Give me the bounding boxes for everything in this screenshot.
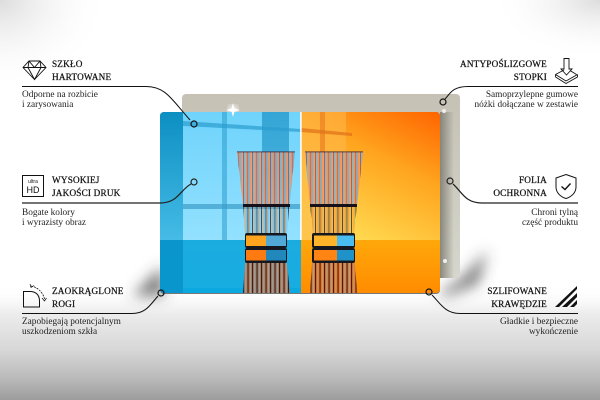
callout line: wysokiej jakości druk: [22, 179, 197, 203]
text: folia ochronna: część produktu: [522, 218, 578, 228]
heading: zaokrąglone rogi: ZAOKRĄGLONE: [52, 286, 124, 296]
heading: zaokrąglone rogi: ROGI: [52, 298, 75, 308]
text: zaokrąglone rogi: [22, 317, 121, 337]
text: szlifowane krawędzie: [500, 317, 578, 337]
callout line: folia ochronna: [447, 178, 578, 203]
heading: szlifowane krawędzie: [487, 286, 547, 310]
heading: antypoślizgowe stopki: ANTYPOŚLIZGOWE: [460, 58, 547, 68]
glass right: [305, 152, 363, 293]
text: folia ochronna: Chroni tylną: [531, 208, 578, 218]
heading: szkło hartowane: HARTOWANE: [52, 72, 111, 82]
icon: diamond: [23, 61, 46, 80]
sparkle: [226, 103, 240, 117]
cast shadows: [132, 250, 488, 297]
callout line: antypoślizgowe stopki: [440, 86, 578, 105]
glass left: [237, 152, 295, 293]
text: antypoślizgowe stopki: nóżki dołączane w zestawie: [474, 100, 578, 110]
callout line: szlifowane krawędzie: [426, 289, 578, 314]
heading: szkło hartowane: SZKŁO: [52, 58, 83, 68]
heading: szlifowane krawędzie: KRAWĘDZIE: [491, 298, 547, 308]
text: szkło hartowane: i zarysowania: [22, 100, 73, 110]
callout line: zaokrąglone rogi: [22, 290, 164, 314]
icon: rounded corner: [24, 284, 46, 307]
icon: ultra HD: ultra: [28, 179, 38, 185]
orange half: [300, 112, 440, 293]
back plate with standoffs: [182, 94, 460, 278]
heading: szlifowane krawędzie: SZLIFOWANE: [487, 286, 547, 296]
glass print: [160, 112, 440, 294]
heading: folia ochronna: FOLIA: [519, 174, 547, 184]
text: szkło hartowane: Odporne na rozbicie: [22, 90, 98, 100]
text: folia ochronna: [522, 208, 578, 228]
heading: folia ochronna: OCHRONNA: [493, 188, 547, 198]
text: szkło hartowane: [22, 90, 98, 110]
heading: szkło hartowane: [52, 58, 111, 82]
text: zaokrąglone rogi: uszkodzeniom szkła: [22, 327, 97, 337]
icon: ground edges: [555, 286, 577, 307]
text: wysokiej jakości druk: [22, 208, 86, 228]
heading: folia ochronna: [493, 174, 547, 198]
heading: wysokiej jakości druk: WYSOKIEJ: [52, 174, 100, 184]
icon: ultra HD: HD: [26, 185, 40, 195]
text: szlifowane krawędzie: Gładkie i bezpieczne: [500, 317, 578, 327]
text: wysokiej jakości druk: Bogate kolory: [22, 208, 75, 218]
icon: anti-slip feet: [556, 58, 578, 84]
blue half: [160, 112, 301, 293]
text: antypoślizgowe stopki: [474, 90, 578, 110]
heading: antypoślizgowe stopki: [460, 58, 547, 82]
callout line: szkło hartowane: [22, 86, 197, 127]
heading: antypoślizgowe stopki: STOPKI: [514, 72, 547, 82]
text: wysokiej jakości druk: i wyrazisty obraz: [22, 218, 86, 228]
heading: zaokrąglone rogi: [52, 286, 124, 308]
text: zaokrąglone rogi: Zapobiegają potencjalnym: [22, 317, 121, 327]
text: antypoślizgowe stopki: Samoprzylepne gumowe: [486, 90, 578, 100]
icon: ultra HD: [22, 176, 44, 196]
icon: shield: [556, 174, 576, 198]
heading: wysokiej jakości druk: [52, 174, 121, 198]
text: szlifowane krawędzie: wykończenie: [529, 327, 578, 337]
heading: wysokiej jakości druk: JAKOŚCI DRUK: [52, 188, 121, 198]
